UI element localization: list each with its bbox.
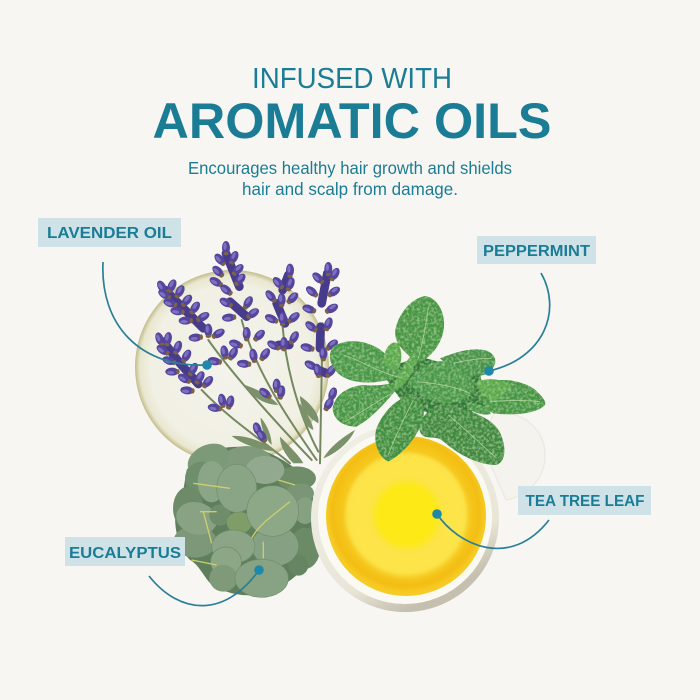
lavender spike: right <box>300 262 342 379</box>
label: eucalyptus <box>65 537 185 566</box>
subtitle: Encourages healthy hair growth and shields <box>188 158 512 178</box>
label: peppermint <box>477 236 596 264</box>
mint leaf: bright small <box>383 342 401 370</box>
oil pool <box>347 456 467 576</box>
lavender <box>154 241 355 463</box>
mint veins <box>343 307 540 458</box>
bowl rim <box>311 424 499 612</box>
callout line: tea tree leaf <box>432 509 549 548</box>
peppermint <box>330 296 545 465</box>
lavender spike: left upper <box>155 278 226 342</box>
mint leaf: right <box>479 380 545 414</box>
lavender narrow leaves <box>232 385 355 463</box>
mint center mass <box>380 357 487 420</box>
title <box>152 63 552 149</box>
glass bowl of oil <box>311 424 499 612</box>
lavender stems <box>202 320 323 463</box>
callout line: peppermint <box>484 273 550 376</box>
callout line: lavender oil <box>103 262 212 370</box>
mint leaf: lower right dark <box>419 404 504 465</box>
callout line: eucalyptus <box>149 565 264 606</box>
subtitle: hair and scalp from damage. <box>242 179 458 199</box>
label: lavender oil <box>38 218 181 247</box>
lavender spike: center right <box>263 264 302 352</box>
oil droplet: left <box>135 270 329 464</box>
mint leaf: upper left <box>330 341 403 383</box>
lavender spike core shading <box>163 253 327 384</box>
subtitle <box>188 158 512 199</box>
eucalyptus base mass <box>175 447 318 595</box>
lavender spike: left lower <box>154 331 215 395</box>
mint leaf: lower left <box>333 377 410 427</box>
label: eucalyptus: EUCALYPTUS <box>69 545 181 562</box>
label: peppermint: PEPPERMINT <box>483 243 590 260</box>
label: tea tree leaf <box>518 486 651 515</box>
mint leaf: right upper <box>440 349 495 376</box>
title line: aromatic oils: AROMATIC OILS <box>152 93 552 149</box>
mint leaf: bottom <box>375 395 424 462</box>
mint leaf: top <box>395 296 444 363</box>
eucalyptus <box>173 437 320 597</box>
label: tea tree leaf: TEA TREE LEAF <box>526 493 645 510</box>
lavender small sprigs <box>207 345 339 444</box>
title line: infused with: INFUSED WITH <box>252 63 452 95</box>
label: lavender oil: LAVENDER OIL <box>47 225 172 242</box>
oil <box>326 436 486 596</box>
lavender spike: center tall <box>208 241 272 368</box>
oil droplet: right <box>480 412 545 500</box>
mint leaf: center <box>407 361 474 403</box>
